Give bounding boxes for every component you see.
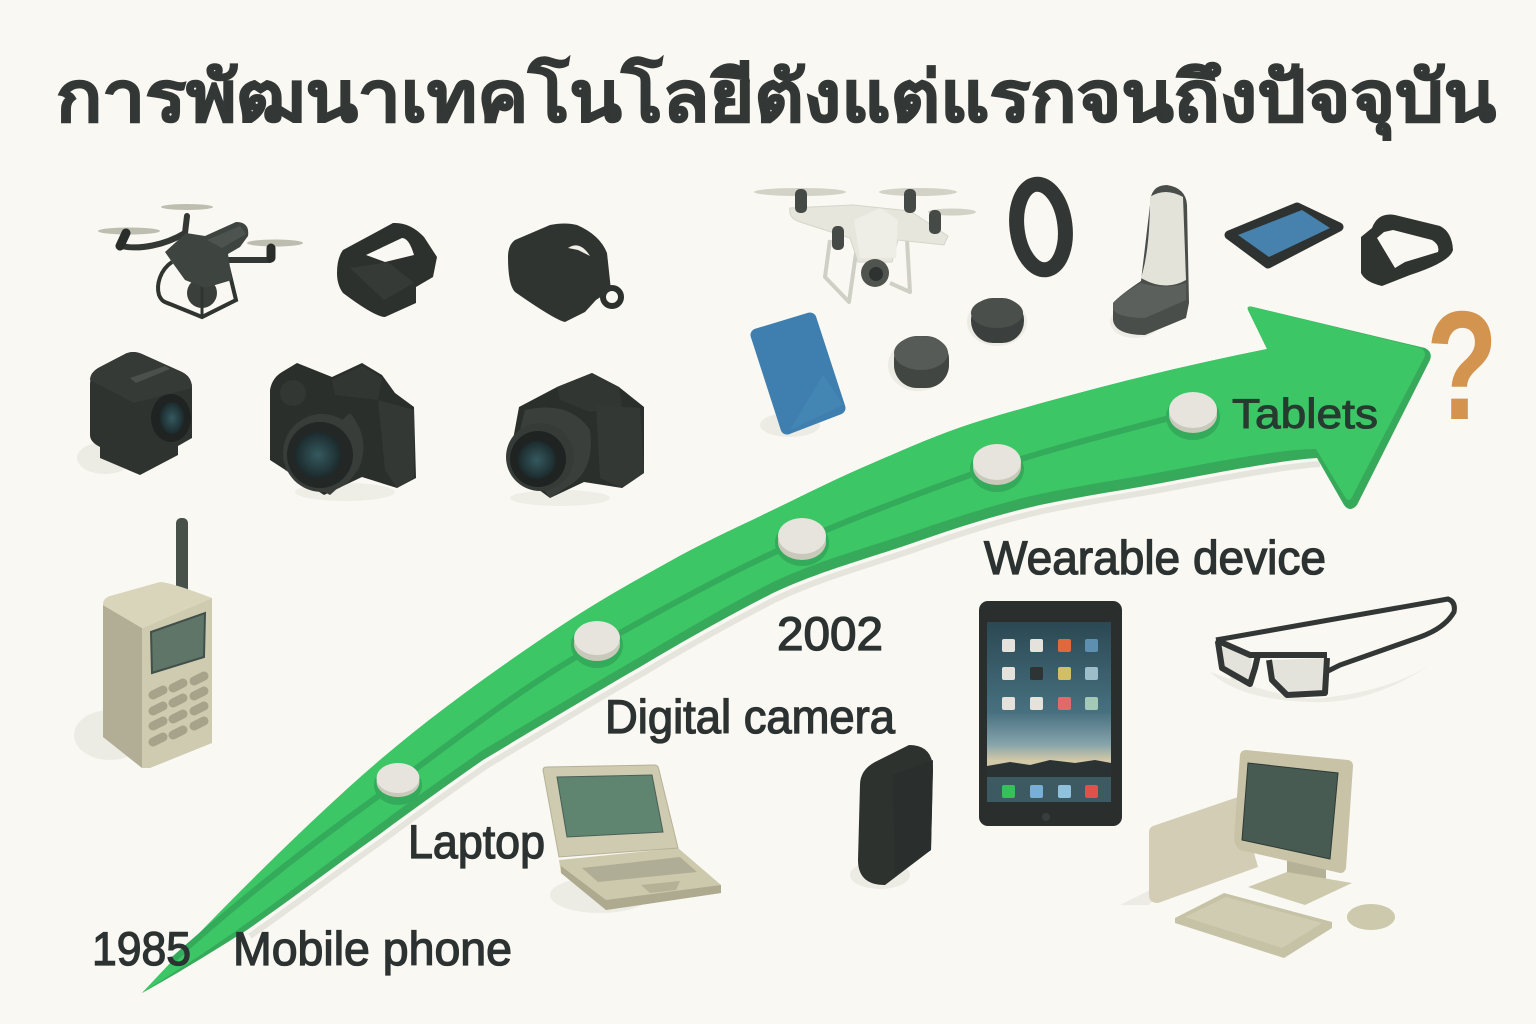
label: 2002: 2002 xyxy=(777,607,883,660)
icon: smart glasses xyxy=(1210,599,1454,702)
icon: fitness band xyxy=(1361,215,1453,286)
icon: iPad tablet xyxy=(979,601,1122,826)
icon: laptop xyxy=(543,765,721,913)
arrow light face xyxy=(142,307,1425,993)
icon: blue smartphone xyxy=(757,319,843,437)
icon: action camera xyxy=(77,352,192,475)
icon: small tablet xyxy=(1229,207,1339,264)
small tablet screen xyxy=(1238,210,1330,257)
icon: desktop computer xyxy=(1120,750,1395,958)
label: Digital camera: Digital camera xyxy=(605,690,896,743)
icon: pucks xyxy=(888,298,1027,391)
center line xyxy=(173,412,1193,960)
icon: DSLR camera 2 xyxy=(506,373,644,506)
question mark: ? xyxy=(1426,279,1498,453)
icon: smart speaker xyxy=(1110,185,1189,338)
milestone dots xyxy=(374,392,1220,805)
title: การพัฒนาเทคโนโลยีตังแต่แรกจนถึงปัจจุบัน xyxy=(56,56,1496,141)
label: Mobile phone: Mobile phone xyxy=(233,922,512,975)
label: Wearable device: Wearable device xyxy=(984,531,1326,584)
icon: black portable device xyxy=(850,745,933,889)
icon: black drone xyxy=(98,204,303,317)
icon: ring xyxy=(1012,181,1070,273)
label: Laptop: Laptop xyxy=(408,815,545,868)
label: 1985: 1985 xyxy=(92,922,191,975)
timeline arrow xyxy=(142,307,1431,993)
icon: VR headset with strap xyxy=(508,224,621,322)
icon: VR headset xyxy=(337,223,437,317)
icon: mobile phone 1985 xyxy=(74,518,212,768)
icon: DSLR camera xyxy=(270,363,416,501)
icon: white drone xyxy=(754,188,976,302)
label: Tablets: Tablets xyxy=(1232,390,1378,437)
